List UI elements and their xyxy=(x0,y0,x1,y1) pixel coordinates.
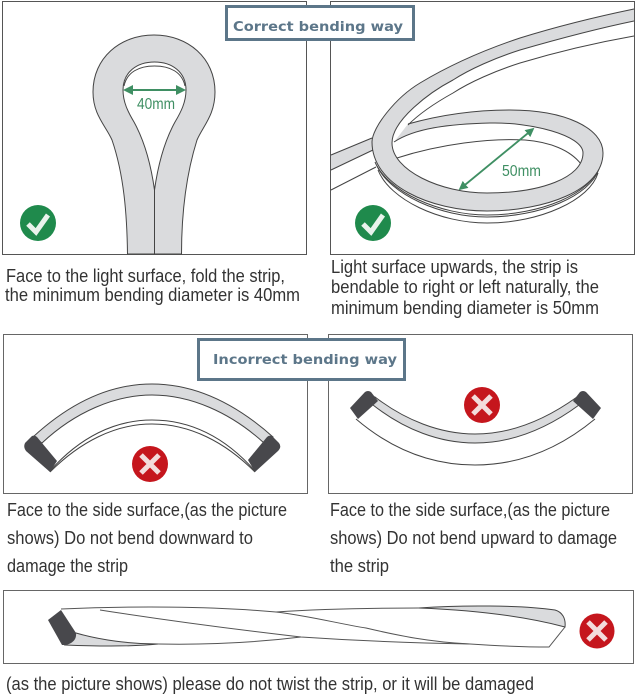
caption: downward bend: damage the strip xyxy=(7,556,128,576)
caption: bend 50mm: bendable to right or left naturally, the xyxy=(331,277,599,297)
caption: downward bend: Face to the side surface,(as the picture xyxy=(7,500,287,520)
arrow: 50mm diameter: 50mm xyxy=(502,163,541,180)
caption: upward bend xyxy=(330,500,617,576)
caption: fold 40mm: Face to the light surface, fold the strip, xyxy=(6,266,285,286)
caption: downward bend xyxy=(7,500,287,576)
strip bent downward xyxy=(24,384,280,472)
panel: upward bend xyxy=(328,334,632,494)
arrow: 40mm diameter xyxy=(125,90,184,113)
strip folded loop xyxy=(93,35,215,254)
icon: red cross xyxy=(580,614,614,648)
panel: twist xyxy=(4,590,634,664)
heading: incorrect bending way xyxy=(198,340,404,380)
panel: downward bend xyxy=(4,334,308,494)
caption: bend 50mm xyxy=(331,257,599,318)
icon: red cross xyxy=(132,446,168,482)
caption: bend 50mm: Light surface upwards, the strip is xyxy=(331,257,578,277)
strip left and back section xyxy=(331,110,603,223)
arrow: 40mm diameter: 40mm xyxy=(137,96,175,113)
strip bent upward xyxy=(350,391,601,465)
caption: fold 40mm: the minimum bending diameter is 40mm xyxy=(5,285,300,305)
caption: upward bend: shows) Do not bend upward to damage xyxy=(330,528,617,548)
heading: incorrect bending way: Incorrect bending way xyxy=(213,352,397,368)
icon: green check xyxy=(355,205,391,241)
heading: correct bending way xyxy=(226,6,414,40)
caption: upward bend: the strip xyxy=(330,556,389,576)
caption: fold 40mm xyxy=(5,266,300,305)
icon: green check xyxy=(20,205,56,241)
icon: red cross xyxy=(464,387,500,423)
caption: upward bend: Face to the side surface,(as the picture xyxy=(330,500,610,520)
strip ring and rising section xyxy=(372,9,634,211)
caption: downward bend: shows) Do not bend downward to xyxy=(7,528,253,548)
arrow: 50mm diameter xyxy=(460,129,541,189)
heading: correct bending way: Correct bending way xyxy=(233,19,403,35)
caption: twist: (as the picture shows) please do not twist the strip, or it will be damaged xyxy=(6,674,534,694)
panel: bend 50mm xyxy=(330,2,634,254)
caption: bend 50mm: minimum bending diameter is 50mm xyxy=(331,298,599,318)
panel: fold 40mm xyxy=(2,2,306,254)
twisted strip xyxy=(48,606,565,647)
